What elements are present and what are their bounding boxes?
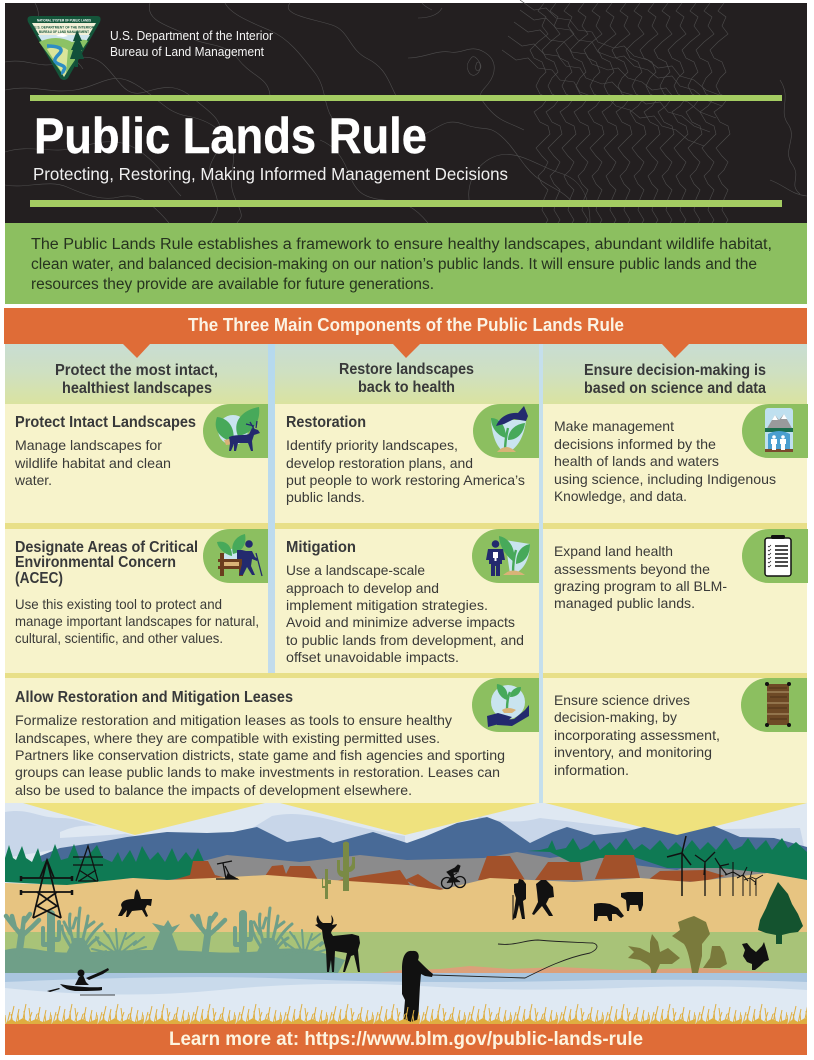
card: protect intact landscapes: wildlife habitat and clean <box>14 455 171 471</box>
icon: mountain and people <box>742 404 808 458</box>
agency name <box>110 28 274 59</box>
card: mitigation: Use a landscape-scale <box>286 562 425 578</box>
card: mitigation: Avoid and minimize adverse impacts <box>286 614 515 630</box>
title: Public Lands Rule <box>34 108 427 164</box>
column heading: restore: back to health <box>358 379 455 396</box>
header panel <box>5 0 807 226</box>
card: restoration: put people to work restoring America’s <box>286 472 525 488</box>
card: science drives decisions: decision-making, by <box>554 709 677 725</box>
card: mitigation: approach to develop and <box>286 580 439 596</box>
card: science informed decisions: Make management <box>554 418 674 434</box>
card: protect intact landscapes: Manage landscapes for <box>15 437 162 453</box>
cactus large <box>337 842 355 891</box>
cows <box>594 892 643 921</box>
card: restoration and mitigation leases: also be used to balance the impacts of development elsewhere. <box>15 782 412 798</box>
icon: BLM shield logo: BUREAU OF LAND MANAGEMENT <box>39 30 90 34</box>
card: science drives decisions: inventory, and monitoring <box>554 744 712 760</box>
card: restoration and mitigation leases: groups can lease public lands to make investments in restoration. Leases can <box>15 764 500 780</box>
kayaker <box>47 968 115 995</box>
card: science informed decisions: Knowledge, and data. <box>554 488 687 504</box>
fisherman <box>402 951 433 1024</box>
intro text band: The Public Lands Rule establishes a framework to ensure healthy landscapes, abundant wildlife habitat, <box>31 236 772 253</box>
card: expand land health assessments: assessments beyond the <box>554 561 710 577</box>
icon: BLM shield logo <box>28 16 101 80</box>
card: science informed decisions: decisions informed by the <box>554 436 716 452</box>
card: designate ACEC: (ACEC) <box>15 570 63 587</box>
card: designate ACEC: Environmental Concern <box>15 554 176 571</box>
card: restoration <box>275 404 539 529</box>
icon: soil core sample <box>741 678 807 732</box>
topographic contour lines <box>5 0 807 226</box>
bottom green rule <box>30 200 782 207</box>
column heading: protect: healthiest landscapes <box>62 380 212 397</box>
sage vegetation silhouettes <box>5 908 345 973</box>
card: science drives decisions: incorporating assessment, <box>554 727 720 743</box>
grey ridge <box>190 852 764 895</box>
mountain biker <box>442 865 466 888</box>
card: restoration and mitigation leases: Allow Restoration and Mitigation Leases <box>15 689 293 706</box>
agency name: Bureau of Land Management <box>110 44 264 59</box>
card: mitigation: Mitigation <box>286 539 356 556</box>
subtitle: Protecting, Restoring, Making Informed Management Decisions <box>33 164 508 184</box>
card: protect intact landscapes <box>5 404 268 529</box>
card: mitigation: to public lands from development, and <box>286 632 524 648</box>
card: expand land health assessments: managed public lands. <box>554 595 695 611</box>
column heading: protect: Protect the most intact, <box>55 362 218 379</box>
orange components banner <box>4 308 807 358</box>
card: expand land health assessments: Expand land health <box>554 543 673 559</box>
card: restoration and mitigation leases: Partners like conservation districts, state game and fish agencies and sporting <box>15 747 505 763</box>
water <box>5 973 807 1024</box>
hikers <box>513 879 554 920</box>
cactus small <box>322 869 331 899</box>
pumpjack <box>216 861 238 879</box>
icon: hiker and fence <box>203 529 268 583</box>
card: science informed decisions <box>543 404 808 529</box>
card: restoration and mitigation leases: Formalize restoration and mitigation leases as tools to ensure healthy <box>15 712 452 728</box>
footer bar: Learn more at: https://www.blm.gov/public-lands-rule <box>169 1029 643 1050</box>
column heading: protect <box>55 362 218 397</box>
card: science drives decisions: Ensure science drives <box>554 692 690 708</box>
blue mountain range <box>40 817 807 885</box>
rust buttes <box>170 855 725 890</box>
sky and snowy peaks <box>5 803 807 888</box>
tower large <box>21 860 72 918</box>
deer <box>315 915 360 972</box>
card: designate ACEC: Designate Areas of Critical <box>15 539 198 556</box>
card: restoration: public lands. <box>286 489 365 505</box>
fly fishing line <box>432 940 597 978</box>
card: expand land health assessments: grazing program to all BLM- <box>554 578 727 594</box>
column heading: ensure: Ensure decision-making is <box>584 362 766 379</box>
agency name: U.S. Department of the Interior <box>110 28 274 43</box>
wind turbines <box>667 836 763 896</box>
icon: leaves and elk <box>203 404 268 458</box>
tower small <box>73 846 103 881</box>
card: designate ACEC: cultural, scientific, and other values. <box>15 630 223 646</box>
card: science informed decisions: using science, including Indigenous <box>554 471 776 487</box>
icon: clipboard checklist <box>742 529 808 583</box>
pine tree <box>758 882 803 944</box>
footer bar <box>5 1024 807 1055</box>
card: science drives decisions <box>543 678 807 803</box>
card: restoration and mitigation leases <box>5 678 539 803</box>
golden grass <box>5 1000 807 1024</box>
card: restoration: Restoration <box>286 414 366 431</box>
card: restoration and mitigation leases: landscapes, where they are compatible with existing permitted uses. <box>15 730 440 746</box>
rider on horse <box>118 889 152 917</box>
column heading: ensure: based on science and data <box>584 380 766 397</box>
column header gradient backgrounds <box>5 344 807 804</box>
landscape illustration <box>5 803 807 1024</box>
icon: hand over seedling <box>473 404 539 458</box>
icon: BLM shield logo: NATIONAL SYSTEM OF PUBLIC LANDS <box>37 18 91 22</box>
column heading: restore: Restore landscapes <box>339 361 474 378</box>
card: mitigation: implement mitigation strategies. <box>286 597 488 613</box>
icon: hands holding seedling <box>472 678 539 732</box>
card: science drives decisions: information. <box>554 762 629 778</box>
forest right <box>527 838 807 880</box>
sage grouse <box>742 942 769 970</box>
intro text band: resources they provide are available for future generations. <box>31 276 434 293</box>
card: designate ACEC <box>5 529 539 678</box>
card: designate ACEC: manage important landscapes for natural, <box>15 613 259 629</box>
sand plain <box>5 873 807 934</box>
orange components banner: The Three Main Components of the Public Lands Rule <box>188 315 624 335</box>
card: protect intact landscapes: water. <box>14 472 52 488</box>
column heading: ensure <box>584 362 766 397</box>
intro text band <box>5 223 807 304</box>
card: mitigation <box>275 529 539 673</box>
pink shore <box>380 966 780 973</box>
card: restoration: Identify priority landscapes, <box>286 437 458 453</box>
card: designate ACEC: Use this existing tool to protect and <box>15 596 222 612</box>
column heading: restore <box>339 361 474 396</box>
card: expand land health assessments <box>543 529 808 678</box>
forest left <box>5 844 206 885</box>
olive shrubs <box>628 916 727 973</box>
card: science informed decisions: health of lands and waters <box>554 453 719 469</box>
yellow sky chevrons <box>23 803 807 836</box>
top green rule <box>30 95 782 101</box>
card: protect intact landscapes: Protect Intact Landscapes <box>15 414 196 431</box>
green meadow <box>5 932 807 974</box>
card: restoration: develop restoration plans, and <box>286 455 473 471</box>
icon: BLM shield logo: U.S. DEPARTMENT OF THE INTERIOR <box>34 26 94 30</box>
icon: person and seedling <box>472 529 539 583</box>
card: mitigation: offset unavoidable impacts. <box>286 649 459 665</box>
intro text band: clean water, and balanced decision-making on our nation’s public lands. It will ensure public lands and the <box>31 256 757 273</box>
